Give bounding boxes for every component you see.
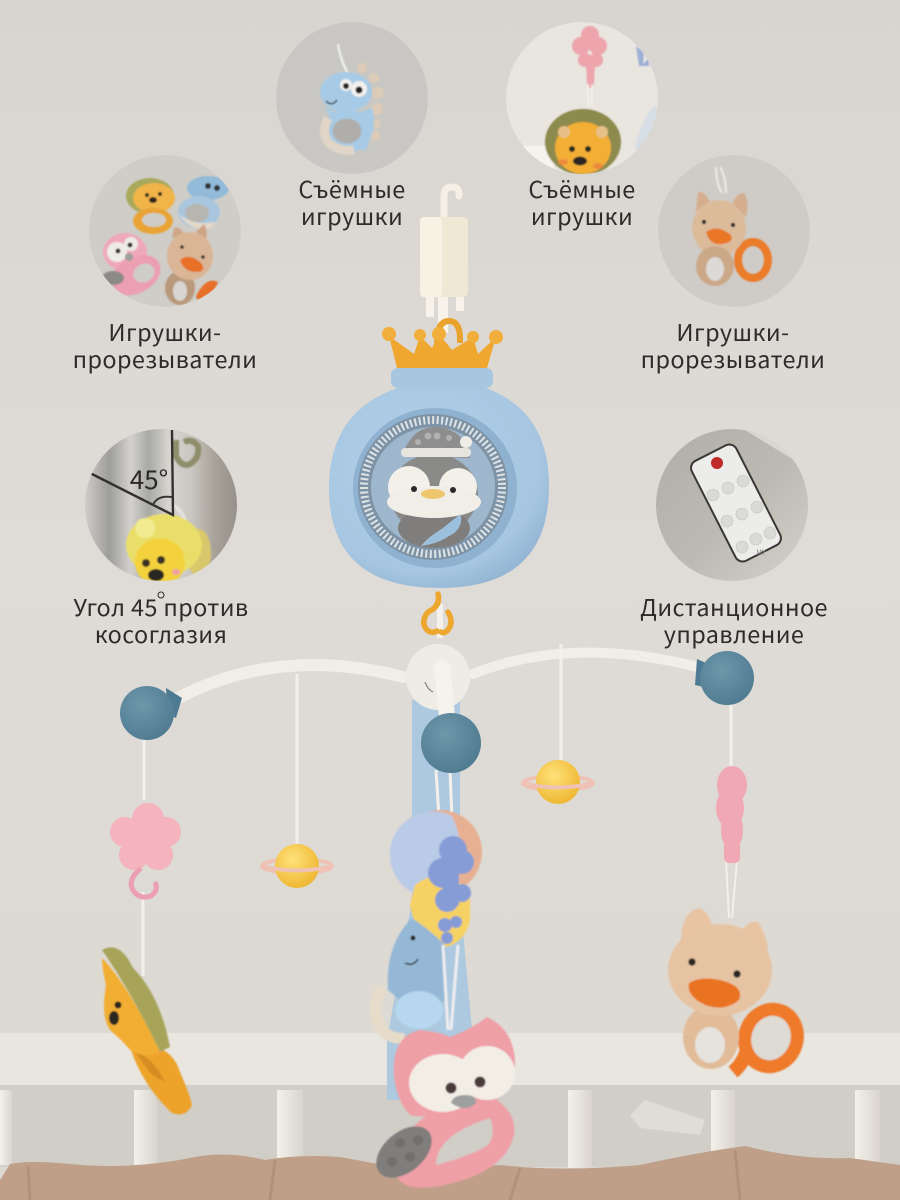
remote control: [688, 442, 784, 564]
glitter ring: [358, 414, 508, 560]
caption: detachable toys right: Съёмные: [528, 171, 636, 205]
tooth ring: [733, 1045, 748, 1072]
caption: remote control: управление: [664, 616, 804, 650]
head: [668, 924, 772, 1016]
mobile arms: [178, 653, 698, 698]
duck teether: [165, 224, 218, 305]
planet right: [523, 760, 593, 804]
strings: [143, 644, 737, 976]
photo: blue dinosaur teether: [276, 22, 428, 174]
caption: teethers left: прорезыватели: [73, 341, 257, 375]
caption: 45 degree angle: [73, 589, 249, 650]
hub: [406, 644, 470, 716]
caption: detachable toys left: Съёмные: [298, 171, 406, 205]
crib rail and slats: [0, 1033, 900, 1168]
pink flower left: [110, 803, 181, 897]
dinosaur spikes: [357, 63, 384, 141]
teether ring: [328, 114, 366, 148]
caption: teethers right: Игрушки-: [676, 314, 790, 348]
angle diagram: [90, 430, 173, 515]
photo: beige duck-billed teether: [658, 155, 810, 307]
centre planets and cloud stack: [375, 810, 482, 1038]
caption: 45 degree angle: Угол 45 против: [73, 589, 249, 623]
caption: 45 degree angle: косоглазия: [95, 616, 227, 650]
photo: assorted teethers: [89, 155, 241, 307]
blue pole behind toys: [387, 700, 473, 1100]
head: [394, 1017, 515, 1117]
squirrel toy right: [668, 908, 805, 1074]
caption: teethers right: прорезыватели: [641, 341, 825, 375]
penguin: [387, 427, 481, 548]
photo: lion toy and pink flower: [506, 22, 661, 176]
body: [683, 1005, 739, 1069]
pink owl teether: [102, 232, 161, 296]
lilac cloud: [428, 836, 474, 944]
ears: [681, 908, 768, 962]
owl toy: [367, 1017, 515, 1188]
hanging clip: [420, 187, 468, 333]
brown bumper: [0, 1146, 900, 1200]
lion toy: [102, 947, 192, 1114]
peach and blue planet: [398, 810, 482, 894]
recess: [353, 408, 517, 568]
pink flower right: [716, 766, 747, 863]
blue dinosaur teether: [178, 176, 229, 229]
collar: [391, 368, 493, 388]
remote control: MY: [756, 548, 766, 558]
crown: [382, 321, 503, 368]
ring body: [392, 1100, 514, 1188]
ball ends: [120, 651, 754, 773]
photo: 45 degree angle: [85, 429, 237, 586]
wing: [367, 1116, 441, 1188]
caption: detachable toys right: игрушки: [531, 198, 633, 232]
caption: remote control: Дистанционное: [640, 589, 828, 623]
lion teether: [126, 178, 175, 234]
angle diagram: 45°: [130, 460, 168, 497]
blue whale toy: [388, 918, 448, 1010]
planet left: [262, 844, 332, 888]
yellow toy: [410, 876, 470, 948]
caption: detachable toys left: игрушки: [301, 198, 403, 232]
body: [329, 386, 549, 588]
caption: teethers left: Игрушки-: [108, 314, 222, 348]
orange hook: [424, 594, 451, 638]
mobile head with crown and penguin: [329, 321, 549, 588]
photo: remote control: [656, 429, 810, 581]
